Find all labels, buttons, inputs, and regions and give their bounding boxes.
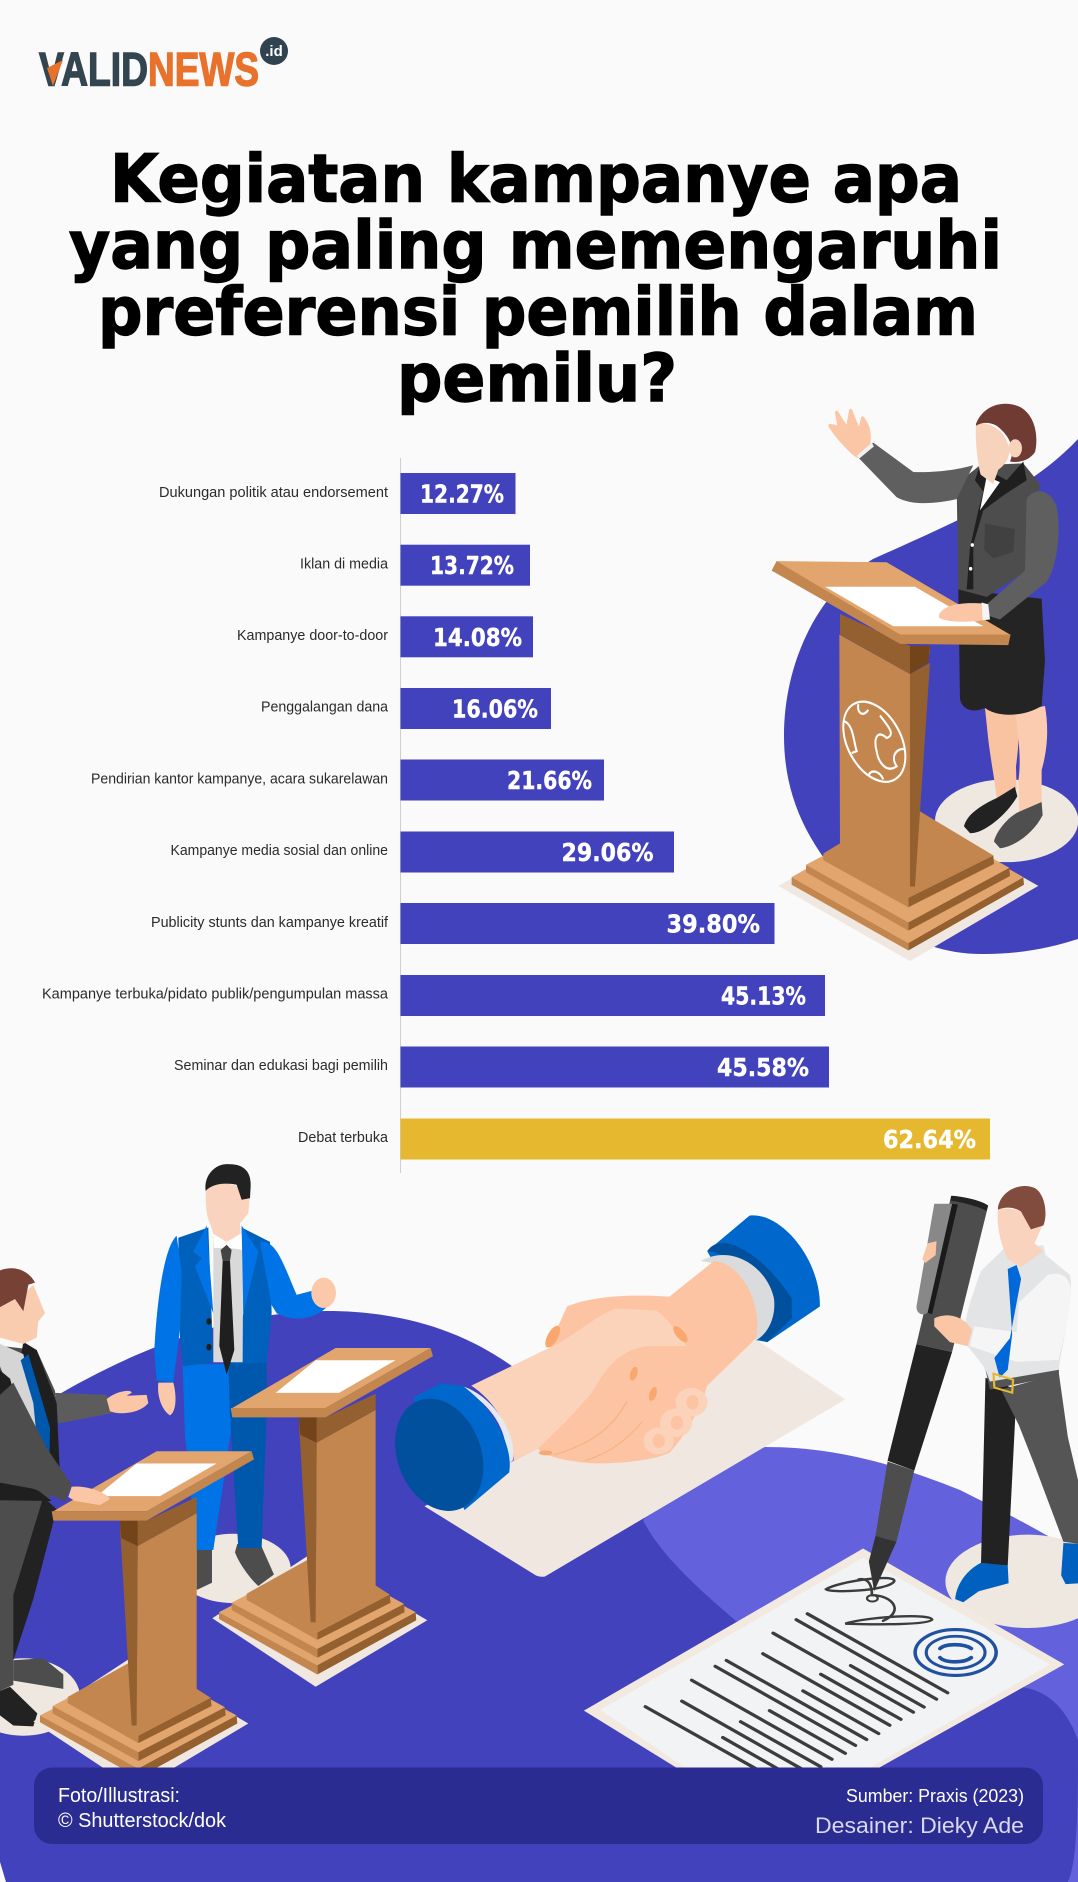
- title: [69, 140, 1002, 417]
- bar: Seminar dan edukasi bagi pemilih: Seminar dan edukasi bagi pemilih: [174, 1058, 388, 1074]
- illustration: handshake, pen and document: [382, 1186, 1078, 1777]
- bar: Dukungan politik atau endorsement: Dukungan politik atau endorsement: [159, 485, 388, 501]
- handshake: [382, 1215, 820, 1520]
- photo credit: © Shutterstock/dok: [58, 1810, 227, 1832]
- bar: Seminar dan edukasi bagi pemilih: 45.58%: [717, 1053, 809, 1082]
- document: [584, 1549, 1064, 1777]
- title: Kegiatan kampanye apa: [110, 140, 962, 218]
- logo: [39, 37, 288, 96]
- man with pen: [955, 1186, 1078, 1602]
- bar: Dukungan politik atau endorsement: [159, 473, 516, 514]
- bar: Publicity stunts dan kampanye kreatif: 39.80%: [666, 910, 760, 938]
- man in grey suit: [0, 1268, 148, 1736]
- man in blue suit: [154, 1164, 336, 1603]
- illustration: woman at podium: [772, 404, 1078, 961]
- illustration: two men at podiums: [0, 1164, 433, 1790]
- podium: front: [33, 1451, 254, 1790]
- bar: Kampanye media sosial dan online: 29.06%: [562, 838, 654, 867]
- bar: Dukungan politik atau endorsement: 12.27%: [420, 480, 504, 508]
- bar: Publicity stunts dan kampanye kreatif: Publicity stunts dan kampanye kreatif: [151, 915, 389, 931]
- title: preferensi pemilih dalam: [98, 274, 978, 350]
- icon: stamp: [915, 1630, 996, 1675]
- bar: Kampanye terbuka/pidato publik/pengumpulan massa: [42, 975, 825, 1016]
- signature: [826, 1578, 932, 1624]
- bar: Iklan di media: 13.72%: [430, 551, 514, 580]
- footer bar: [34, 1768, 1043, 1844]
- bar: Iklan di media: [300, 545, 530, 586]
- photo credit: [58, 1785, 227, 1832]
- podium: back: [212, 1348, 433, 1687]
- bar: Pendirian kantor kampanye, acara sukarelawan: Pendirian kantor kampanye, acara sukarelawan: [91, 771, 388, 787]
- bar: Pendirian kantor kampanye, acara sukarelawan: 21.66%: [507, 766, 592, 795]
- bar: Pendirian kantor kampanye, acara sukarelawan: [91, 760, 604, 800]
- bar: Kampanye door-to-door: 14.08%: [433, 623, 522, 652]
- bar: Iklan di media: Iklan di media: [300, 556, 389, 572]
- blue blob behind woman: [784, 439, 1078, 954]
- logo: NEWS: [148, 42, 259, 96]
- bar: Kampanye terbuka/pidato publik/pengumpulan massa: 45.13%: [721, 982, 806, 1010]
- pen: [869, 1196, 988, 1591]
- handshake plate: [425, 1338, 845, 1577]
- bar: Kampanye media sosial dan online: Kampanye media sosial dan online: [170, 843, 388, 859]
- bar: Publicity stunts dan kampanye kreatif: [151, 903, 774, 944]
- bar: Kampanye door-to-door: [237, 616, 533, 657]
- bar: Penggalangan dana: [261, 688, 551, 729]
- bar: Debat terbuka: Debat terbuka: [298, 1130, 389, 1146]
- bar chart: [42, 458, 990, 1173]
- icon: globe: [830, 689, 918, 795]
- bar: Kampanye media sosial dan online: [170, 832, 674, 872]
- logo: VALID: [39, 42, 148, 96]
- bar: Kampanye door-to-door: Kampanye door-to-door: [237, 628, 388, 644]
- title: pemilu?: [397, 340, 677, 417]
- feet shadow: [945, 1535, 1078, 1628]
- bottom background blobs: [0, 1311, 1078, 1882]
- bar: Penggalangan dana: 16.06%: [452, 694, 538, 724]
- title: yang paling memengaruhi: [69, 207, 1002, 284]
- bar: Kampanye terbuka/pidato publik/pengumpulan massa: Kampanye terbuka/pidato publik/pengumpulan massa: [42, 986, 389, 1002]
- photo credit: Foto/Illustrasi:: [58, 1785, 180, 1807]
- source and designer: Sumber: Praxis (2023): [846, 1786, 1024, 1806]
- bar: Seminar dan edukasi bagi pemilih: [174, 1046, 829, 1088]
- source and designer: [815, 1786, 1024, 1838]
- bar: Penggalangan dana: Penggalangan dana: [261, 700, 389, 716]
- bar: Debat terbuka: [298, 1118, 990, 1160]
- source and designer: Desainer: Dieky Ade: [815, 1813, 1024, 1838]
- bar: Debat terbuka: 62.64%: [883, 1125, 976, 1154]
- logo: .id: [265, 43, 283, 60]
